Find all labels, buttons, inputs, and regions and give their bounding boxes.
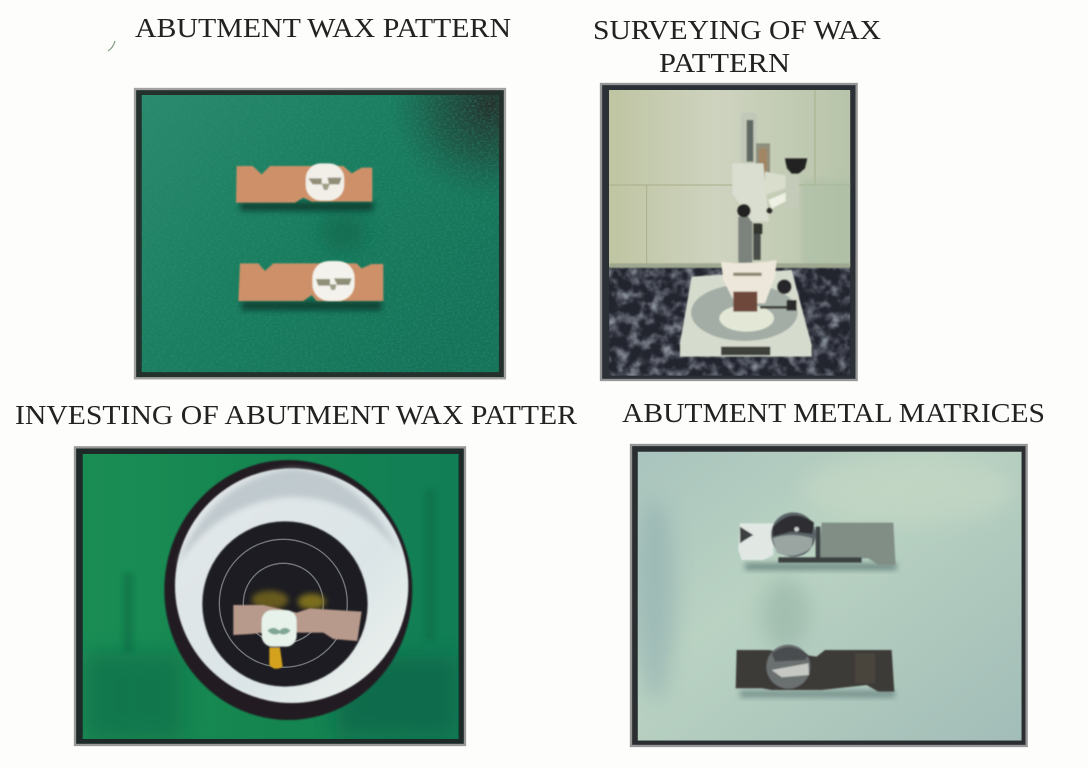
surveyor instrument: [732, 113, 807, 263]
casting ring: [164, 460, 412, 720]
heading: surveying of wax pattern: SURVEYING OF WAX: [593, 15, 882, 45]
tooth: [306, 163, 344, 201]
heading: investing of abutment wax pattern: INVESTING OF ABUTMENT WAX PATTER: [15, 400, 577, 430]
heading: surveying of wax pattern: [593, 15, 882, 78]
heading: abutment metal matrices: ABUTMENT METAL MATRICES: [622, 398, 1045, 428]
metal matrix: upper: [738, 512, 897, 570]
panel: abutment metal matrices photo: [631, 445, 1027, 746]
panel: investing of wax pattern photo: [75, 447, 465, 745]
panel: abutment wax pattern photo: [134, 88, 506, 380]
heading: surveying of wax pattern: PATTERN: [659, 48, 790, 78]
wax bar and tooth: [233, 605, 362, 669]
dark counter: [609, 267, 850, 377]
base and model: [680, 260, 812, 357]
heading: abutment wax pattern: ABUTMENT WAX PATTERN: [135, 13, 511, 43]
panel: surveying of wax pattern photo: [601, 84, 857, 380]
wax bar: upper: [236, 163, 373, 211]
metal matrix: lower: [736, 645, 895, 697]
wax bar: lower: [238, 261, 383, 310]
tooth: [312, 261, 355, 301]
tiled wall: [609, 90, 850, 267]
scan speck mark: [108, 41, 115, 51]
